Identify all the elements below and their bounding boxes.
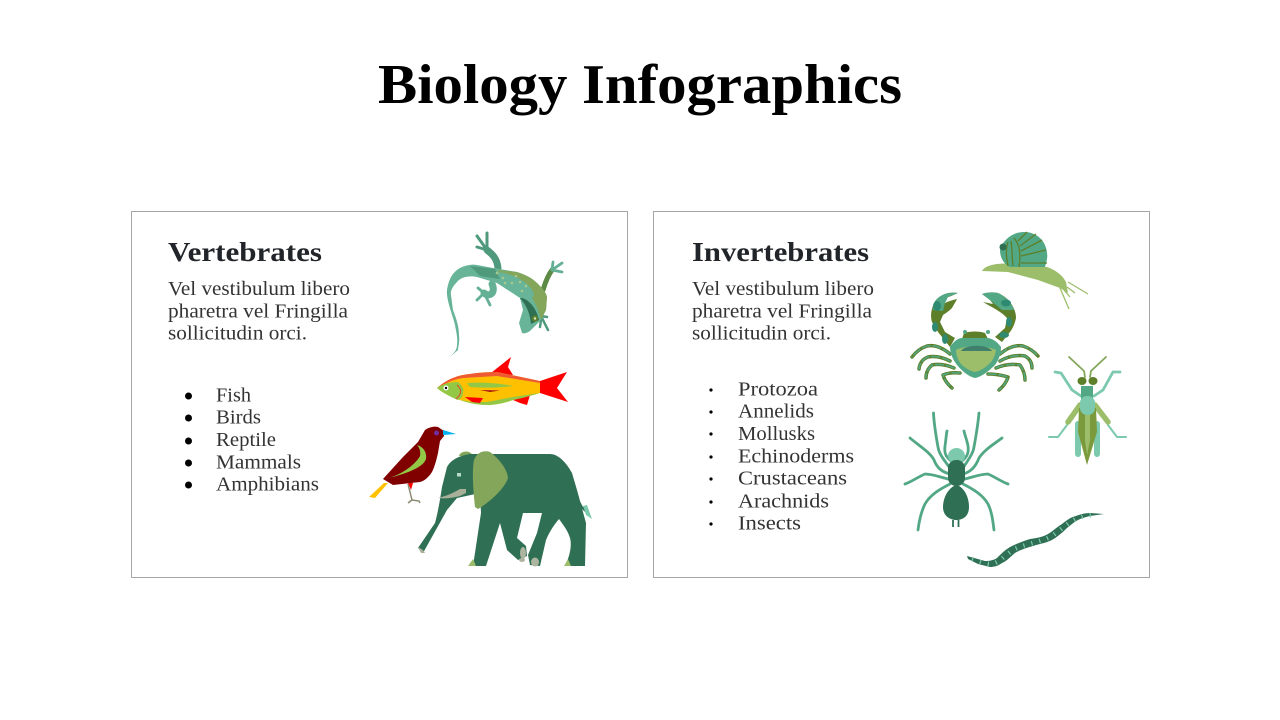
icon: worm bbox=[967, 513, 1104, 567]
list: invertebrate groups: Crustaceans bbox=[738, 468, 847, 490]
list: vertebrate groups bbox=[185, 384, 319, 496]
heading: invertebrates: Invertebrates bbox=[692, 236, 869, 267]
text block: vertebrates description: Vel vestibulum libero bbox=[168, 278, 350, 300]
list: invertebrate groups: Echinoderms bbox=[738, 446, 854, 468]
list: invertebrate groups bbox=[709, 378, 854, 534]
list: invertebrate groups: Arachnids bbox=[738, 490, 829, 512]
list: vertebrate groups: Amphibians bbox=[216, 474, 319, 496]
panel: invertebrates bbox=[654, 212, 1150, 578]
icon: grasshopper bbox=[1049, 357, 1126, 465]
icon: crab bbox=[912, 292, 1038, 390]
list: vertebrate groups: Birds bbox=[216, 406, 261, 428]
icon: bird bbox=[369, 427, 456, 503]
panel: vertebrates bbox=[132, 212, 628, 578]
list: invertebrate groups: Protozoa bbox=[738, 378, 818, 400]
icon: elephant bbox=[418, 451, 592, 566]
text block: vertebrates description bbox=[168, 278, 350, 344]
list: invertebrate groups: Insects bbox=[738, 512, 801, 534]
title: Biology Infographics bbox=[378, 54, 902, 116]
text block: invertebrates description: Vel vestibulum libero bbox=[692, 278, 874, 300]
icon: snail bbox=[982, 232, 1088, 309]
text block: vertebrates description: pharetra vel Fringilla bbox=[168, 300, 348, 322]
list: vertebrate groups: Mammals bbox=[216, 452, 301, 474]
list: vertebrate groups: Reptile bbox=[216, 429, 276, 451]
heading: vertebrates: Vertebrates bbox=[168, 236, 322, 267]
list: invertebrate groups: Mollusks bbox=[738, 423, 815, 445]
icon: fish bbox=[437, 357, 568, 405]
text block: invertebrates description: pharetra vel Fringilla bbox=[692, 300, 872, 322]
text block: invertebrates description: sollicitudin orci. bbox=[692, 322, 831, 344]
list: invertebrate groups: Annelids bbox=[738, 400, 814, 422]
text block: invertebrates description bbox=[692, 278, 874, 344]
icon: lizard bbox=[447, 233, 562, 357]
icon: spider bbox=[905, 413, 1008, 530]
list: vertebrate groups: Fish bbox=[216, 384, 251, 406]
text block: vertebrates description: sollicitudin orci. bbox=[168, 322, 307, 344]
